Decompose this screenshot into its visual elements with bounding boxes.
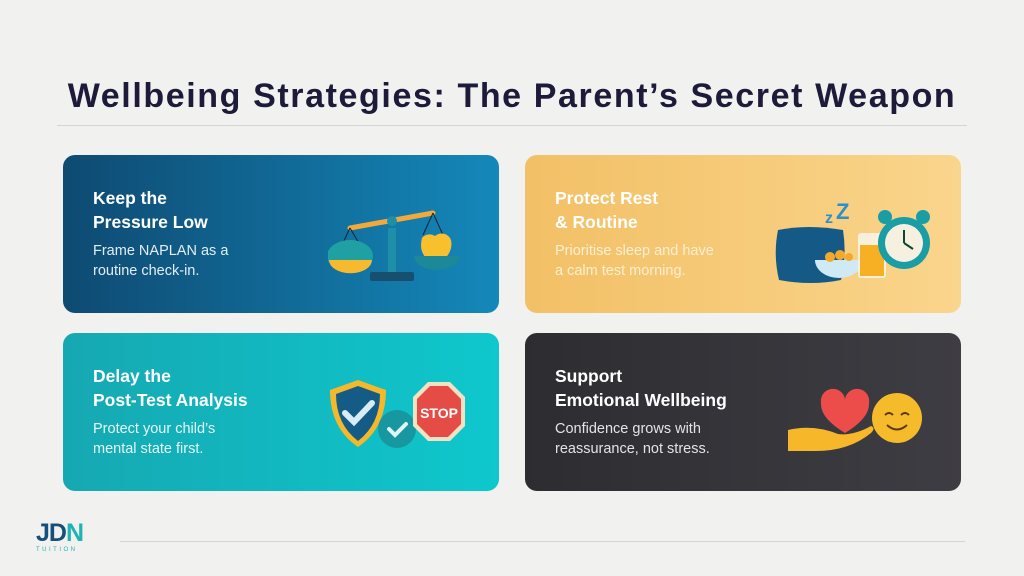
heading: Emotional Wellbeing: [555, 390, 727, 410]
heading: Support: [555, 366, 622, 386]
icon: heart hand smile: [788, 388, 922, 451]
text block: [555, 243, 714, 278]
heading: [93, 366, 248, 410]
icon: shield and stop: [330, 380, 465, 448]
heading: [555, 366, 727, 410]
heading: Protect Rest: [555, 188, 658, 208]
text block: Protect your child’s: [93, 421, 215, 437]
text block: Confidence grows with: [555, 421, 701, 437]
heading: Delay the: [93, 366, 171, 386]
icon: scales: [328, 210, 460, 281]
heading: Keep the: [93, 188, 167, 208]
panel: emotional wellbeing: [525, 333, 961, 491]
heading: [93, 188, 208, 232]
heading: Pressure Low: [93, 212, 208, 232]
icon: sleep and clock: z: [825, 210, 833, 227]
icon: sleep and clock: Z: [836, 199, 849, 224]
title: Wellbeing Strategies: The Parent’s Secret Weapon: [68, 77, 956, 115]
icon: sleep and clock: [776, 199, 930, 283]
icon: shield and stop: STOP: [420, 405, 458, 421]
heading: & Routine: [555, 212, 638, 232]
text block: routine check-in.: [93, 262, 199, 278]
heading: [555, 188, 658, 232]
panel: protect rest: [525, 155, 961, 313]
panel: delay analysis: [63, 333, 499, 491]
panel: keep pressure low: [63, 155, 499, 313]
text block: mental state first.: [93, 440, 203, 456]
logo: TUITION: [36, 547, 78, 553]
text block: Prioritise sleep and have: [555, 243, 714, 259]
text block: [93, 421, 215, 456]
text block: [555, 421, 710, 456]
logo: JDN: [36, 519, 83, 547]
text block: a calm test morning.: [555, 262, 686, 278]
text block: Frame NAPLAN as a: [93, 243, 228, 259]
heading: Post-Test Analysis: [93, 390, 248, 410]
text block: [93, 243, 228, 278]
text block: reassurance, not stress.: [555, 440, 710, 456]
